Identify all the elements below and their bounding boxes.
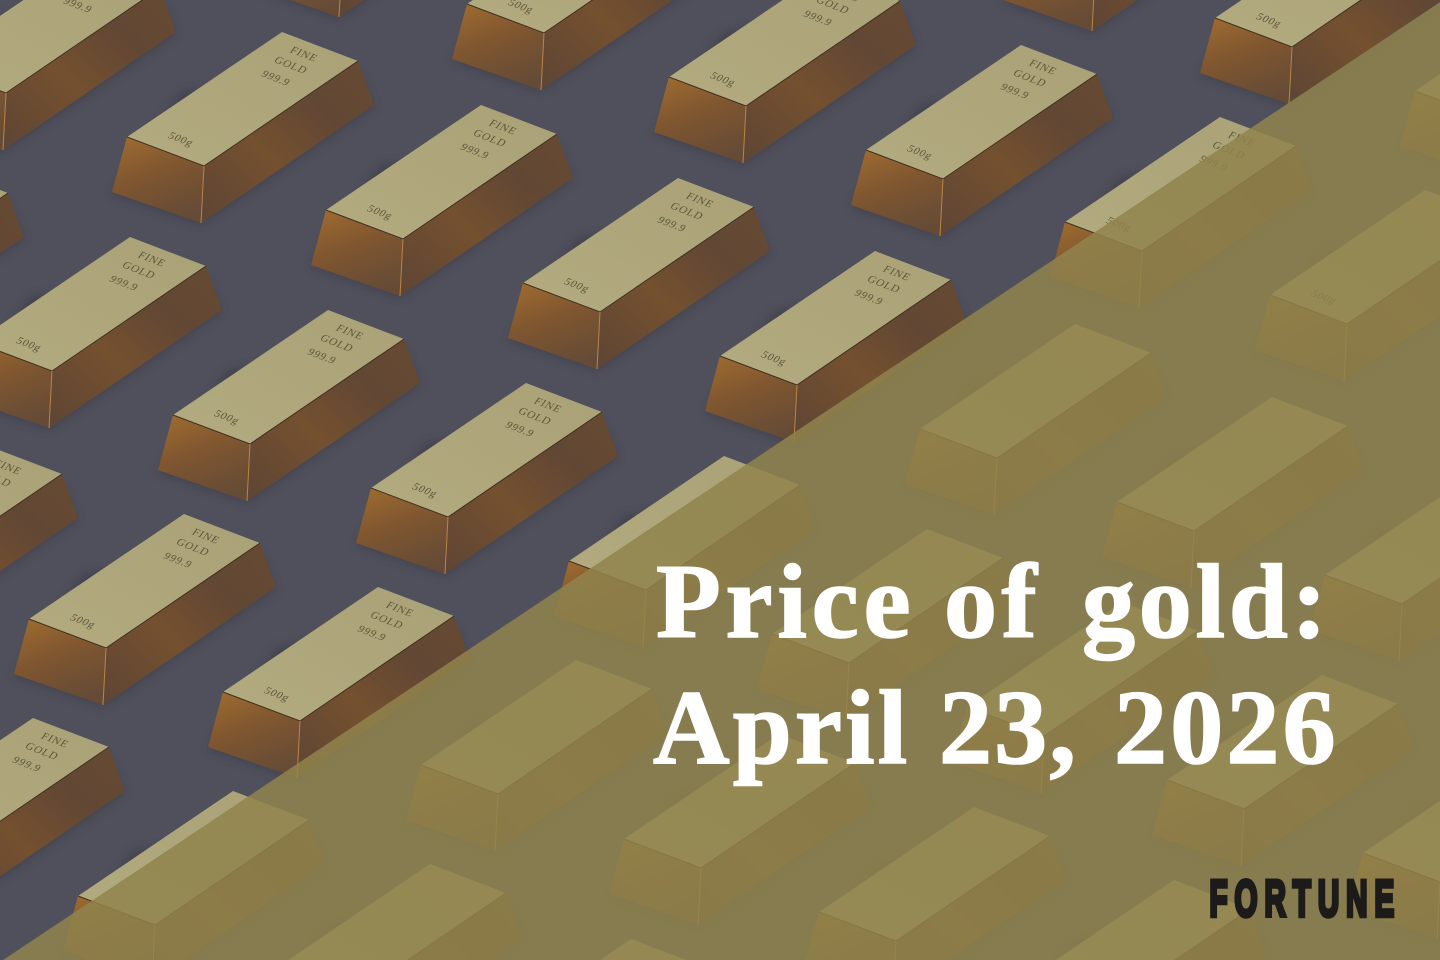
gold bar — [63, 791, 325, 960]
gold bar: 500g — [364, 203, 395, 222]
gold bar — [0, 164, 24, 357]
gold bar: 500g — [758, 349, 789, 368]
gold bar: 500g — [67, 612, 98, 631]
gold bar: FINE — [1225, 130, 1258, 149]
gold bar — [654, 0, 916, 165]
gold bar: FINE — [383, 600, 416, 619]
gold bar: 999.9 — [305, 347, 339, 367]
gold bar: FINE — [135, 250, 168, 269]
gold bar: 999.9 — [259, 69, 293, 89]
gold bar — [905, 324, 1167, 517]
gold bar: 999.9 — [10, 755, 44, 775]
gold bar: FINE — [189, 527, 222, 546]
gold bar — [1400, 0, 1440, 179]
gold bar: 999.9 — [355, 624, 389, 644]
gold bar — [609, 734, 871, 927]
gold bar — [1152, 675, 1414, 868]
gold bar: FINE — [486, 118, 519, 137]
gold bar — [356, 383, 618, 576]
title: Price — [656, 543, 915, 660]
gold bar — [1003, 0, 1265, 33]
gold bar — [757, 529, 1019, 722]
gold bar: GOLD — [1011, 68, 1049, 89]
gold bar — [1102, 397, 1364, 590]
gold bar: 999.9 — [801, 9, 835, 29]
gold bar: 999.9 — [107, 274, 141, 294]
gold bar — [260, 864, 522, 960]
gold bar: 999.9 — [458, 142, 492, 162]
gold bar: 999.9 — [852, 288, 886, 308]
gold bar: 999.9 — [998, 82, 1032, 102]
gold bar: GOLD — [272, 55, 310, 76]
gold bar: 500g — [1103, 215, 1134, 234]
gold bar: FINE — [683, 191, 716, 210]
gold bar: FINE — [531, 396, 564, 415]
gold bar: 500g — [261, 685, 292, 704]
title: of — [944, 543, 1041, 660]
gold bar: FINE — [287, 45, 320, 64]
gold bar — [250, 0, 512, 19]
gold bar — [1200, 0, 1440, 106]
gold bar — [452, 0, 714, 92]
logo: FORTUNE wordmark: FORTUNE — [1210, 869, 1401, 927]
gold bar: 500g — [561, 276, 592, 295]
gold bar: GOLD — [23, 741, 61, 762]
gold bar — [851, 45, 1113, 238]
gold bar: GOLD — [120, 260, 158, 281]
title: April — [653, 669, 910, 786]
gold bar: 500g — [211, 408, 242, 427]
gold bar: GOLD — [516, 406, 554, 427]
gold bar — [0, 0, 176, 152]
gold bar — [1255, 190, 1440, 383]
title: gold: — [1082, 543, 1331, 660]
gold bar: 500g — [1253, 11, 1284, 30]
gold bar: GOLD — [368, 610, 406, 631]
gold bar: 999.9 — [655, 215, 689, 235]
gold bar — [1004, 880, 1266, 960]
gold bar — [311, 105, 573, 298]
gold bar: 500g — [13, 335, 44, 354]
gold bar — [406, 660, 668, 853]
gold bar — [1348, 748, 1440, 941]
gold bar — [705, 251, 967, 444]
gold bar: FINE — [38, 731, 71, 750]
gold bar: FINE — [880, 264, 913, 283]
gold bar — [508, 178, 770, 371]
gold bar: 999.9 — [161, 551, 195, 571]
gold bar — [14, 514, 276, 707]
gold bar: 500g — [165, 130, 196, 149]
gold bar — [112, 32, 374, 225]
gold bar — [0, 718, 125, 911]
gold bar — [1050, 117, 1312, 310]
gold bar — [461, 939, 723, 960]
gold bar — [0, 237, 222, 430]
gold bar: GOLD — [318, 333, 356, 354]
gold bar: 999.9 — [1197, 154, 1231, 174]
gold bar — [804, 807, 1066, 960]
gold bar — [0, 445, 78, 638]
gold bar: GOLD — [668, 201, 706, 222]
gold bar: 500g — [1308, 288, 1339, 307]
gold bar — [158, 310, 420, 503]
gold bar: 500g — [707, 70, 738, 89]
gold bar: FINE — [1026, 58, 1059, 77]
gold bar: 999.9 — [503, 420, 537, 440]
gold bar — [554, 456, 816, 649]
gold bar: 500g — [904, 143, 935, 162]
title: 23, — [939, 669, 1078, 786]
gold bar: FINE — [333, 323, 366, 342]
gold bar — [1310, 470, 1440, 663]
gold bar: 500g — [409, 481, 440, 500]
gold bar — [208, 587, 470, 780]
gold bar — [952, 602, 1214, 795]
gold bar: GOLD — [174, 537, 212, 558]
gold bar: GOLD — [1210, 140, 1248, 161]
title: 2026 — [1114, 669, 1339, 786]
gold bar: GOLD — [471, 128, 509, 149]
gold bar: GOLD — [865, 274, 903, 295]
